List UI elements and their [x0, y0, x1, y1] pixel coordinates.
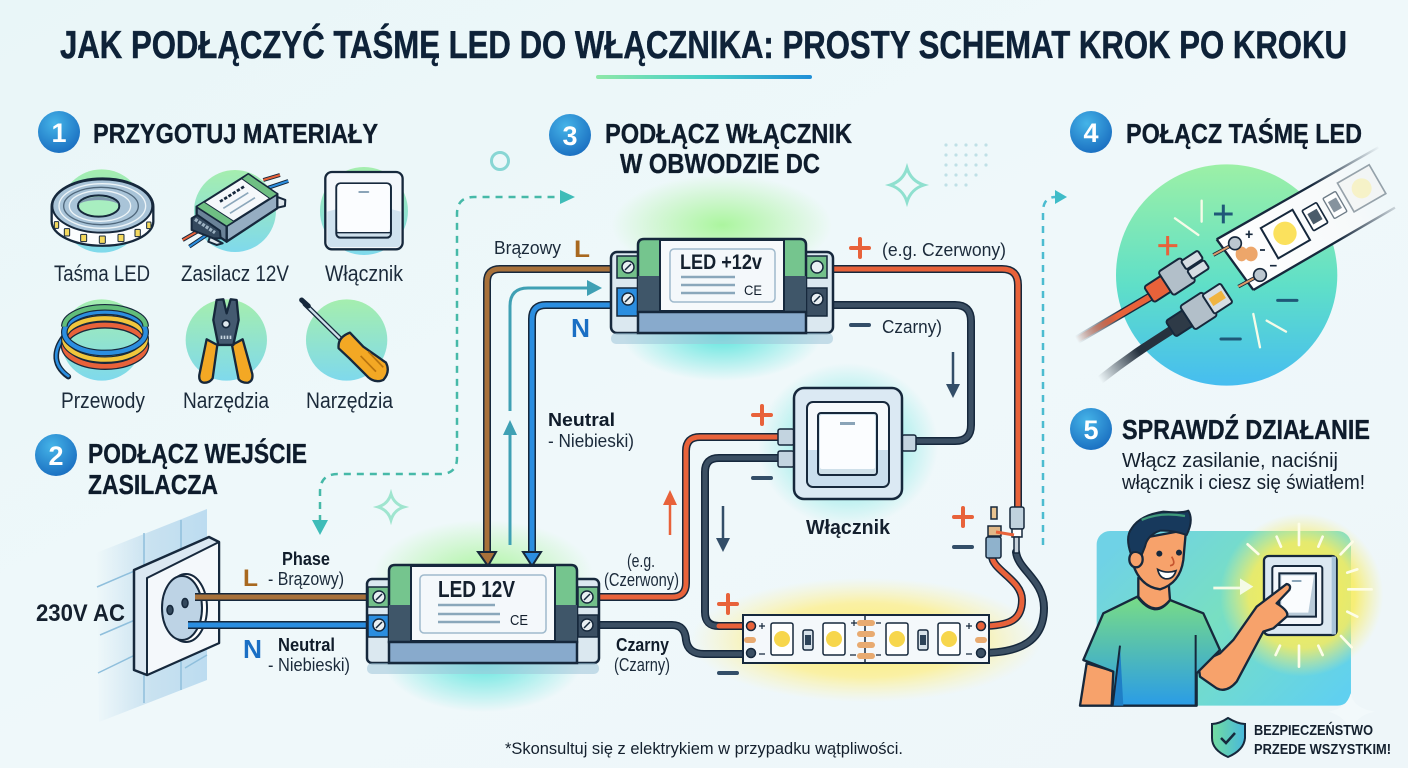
wire junction connectors	[986, 507, 1024, 558]
arrow: teal flow up and right	[503, 280, 602, 545]
switch	[778, 388, 916, 499]
panel: step 3 switch in DC circuit	[494, 114, 1024, 673]
badge: safety	[1212, 718, 1391, 758]
title underline	[596, 75, 812, 79]
icon: coiled wires	[56, 299, 146, 381]
label: LED +12v: LED +12v	[680, 251, 762, 274]
arrow: dashed step 2 to step 3	[312, 190, 575, 535]
wire: blue neutral	[188, 621, 368, 629]
label: Czarny: Czarny)	[882, 317, 942, 337]
power supply: upper	[611, 239, 833, 344]
label: Niebieski: - Niebieski)	[268, 655, 350, 675]
wire: brown upper loop	[487, 269, 618, 552]
panel: step 4 connect LED strip	[1070, 111, 1397, 386]
step 3 badge	[549, 114, 591, 156]
icon: wall switch	[320, 167, 408, 255]
label: Neutral: Neutral	[548, 410, 615, 430]
step 5 description line 2: włącznik i ciesz się światłem!	[1121, 472, 1365, 494]
icon: power supply	[183, 170, 288, 252]
wire: red to junction	[830, 269, 1018, 510]
step 1 heading: PRZYGOTUJ MATERIAŁY	[93, 118, 378, 149]
label: Włącznik: Włącznik	[806, 517, 891, 539]
step 1 badge: 1	[51, 118, 67, 148]
wire: black switch to strip	[705, 458, 780, 626]
step 2 heading line 2: ZASILACZA	[88, 469, 218, 500]
label: N: N	[243, 634, 262, 664]
icon: screwdriver	[302, 299, 388, 381]
icon: shield	[1212, 718, 1245, 757]
icon: wall socket	[134, 537, 219, 675]
label: L: L	[574, 236, 590, 263]
label: CE mark: CE	[510, 612, 528, 629]
step 5 description line 1: Włącz zasilanie, naciśnij	[1122, 450, 1338, 472]
polarity signs	[719, 239, 972, 673]
arrow: dark down to switch	[946, 352, 960, 398]
arrow: orange up	[663, 490, 677, 535]
LED strip	[743, 615, 989, 663]
icon: pliers	[186, 299, 267, 383]
icon: LED tape reel	[52, 169, 153, 253]
wire: blue upper loop	[532, 305, 618, 552]
label: Zasilacz 12V: Zasilacz 12V	[181, 261, 289, 286]
step 4 heading: POŁĄCZ TAŚMĘ LED	[1126, 118, 1362, 149]
power supply: lower	[367, 565, 599, 674]
illustration: strip connection	[1077, 147, 1397, 386]
label: Narzędzia (screwdriver): Narzędzia	[306, 388, 394, 413]
step 2 badge	[35, 434, 77, 476]
label: CE mark upper: CE	[744, 282, 762, 298]
step 4 badge: 4	[1083, 118, 1099, 148]
decorative glows	[373, 175, 1041, 712]
label: Niebieski: - Niebieski)	[548, 431, 634, 451]
arrow: dark down to strip	[716, 506, 730, 552]
panel: step 1 materials	[38, 111, 408, 413]
safety text line 1: BEZPIECZEŃSTWO	[1254, 722, 1373, 739]
label: (Czerwony): (Czerwony)	[604, 570, 679, 590]
icon: brick wall	[96, 509, 207, 722]
label: L: L	[243, 565, 258, 592]
step 3 badge: 3	[562, 121, 578, 151]
step 1 badge	[38, 111, 80, 153]
wire: black to switch	[830, 305, 971, 441]
label: (Czarny): (Czarny)	[614, 655, 670, 675]
arrow: dashed step 3 to step 4	[1043, 190, 1067, 545]
step 5 badge	[1070, 408, 1112, 450]
wire: strip to junction black	[981, 552, 1044, 653]
label: 230V AC: 230V AC	[36, 600, 125, 627]
label: Narzędzia (pliers): Narzędzia	[183, 388, 270, 413]
label: N: N	[571, 313, 590, 343]
step 3 heading line 2: W OBWODZIE DC	[620, 148, 820, 179]
label: e.g. Czerwony: (e.g. Czerwony)	[882, 240, 1006, 260]
label: Przewody: Przewody	[61, 388, 145, 413]
label: LED 12V: LED 12V	[438, 576, 516, 602]
step 2 heading: PODŁĄCZ WEJŚCIE	[88, 438, 307, 469]
footnote: *Skonsultuj się z elektrykiem w przypadku wątpliwości.	[505, 739, 903, 758]
label: Taśma LED: Taśma LED	[54, 261, 150, 286]
wire: brown phase	[195, 593, 368, 601]
wire: strip to junction red	[981, 556, 1022, 626]
wire: red switch to lower PSU	[600, 437, 780, 597]
panel: step 2 mains input	[35, 434, 368, 722]
label: Brązowy: Brązowy	[494, 238, 561, 258]
wire: black lower PSU to strip	[600, 625, 750, 654]
arrowheads on wires	[478, 552, 541, 566]
label: Neutral: Neutral	[278, 635, 335, 655]
step 3 heading: PODŁĄCZ WŁĄCZNIK	[605, 118, 852, 149]
label: Włącznik: Włącznik	[325, 261, 404, 286]
label: Czarny bold: Czarny	[616, 635, 669, 655]
panel: step 5 test	[1070, 408, 1383, 733]
wires: step 3 circuit	[487, 269, 1044, 654]
label: Phase: Phase	[282, 549, 330, 569]
decorative marks	[378, 143, 988, 520]
label: (e.g.: (e.g.	[627, 551, 655, 571]
step 2 badge: 2	[48, 441, 64, 471]
illustration: person pressing switch	[1080, 511, 1383, 733]
step 4 badge	[1070, 111, 1112, 153]
label: Brązowy: - Brązowy)	[268, 569, 344, 589]
step 5 badge: 5	[1083, 415, 1099, 445]
